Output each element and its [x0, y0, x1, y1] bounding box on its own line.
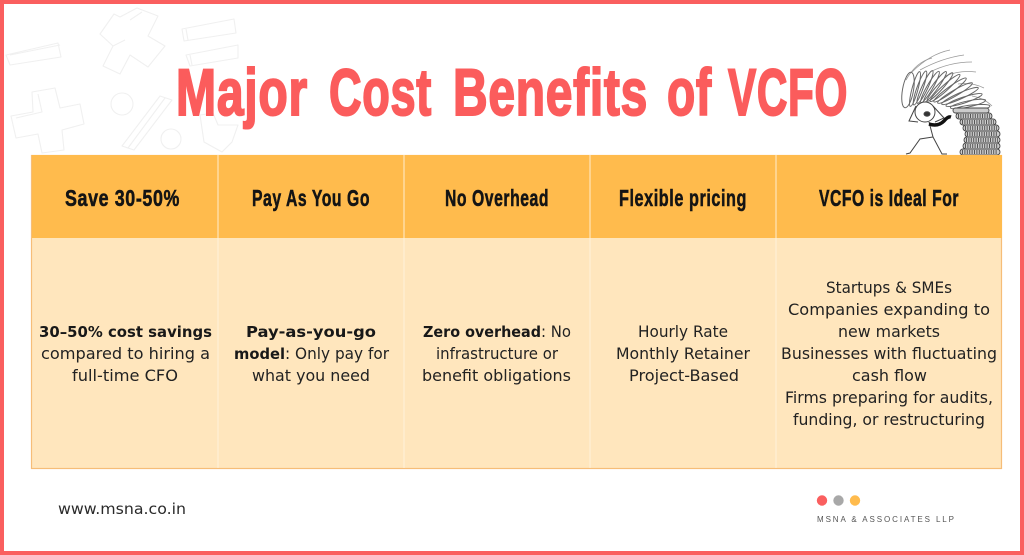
column 2 text: pay as you go: model	[234, 345, 285, 363]
falling coins	[899, 69, 990, 113]
column 3 text: zero overhead: Zero overhead	[423, 323, 541, 341]
stick figure	[906, 102, 951, 154]
column 5 text: ideal for: Firms preparing for audits,	[785, 389, 993, 407]
column 4 text: pricing models: Monthly Retainer	[616, 345, 751, 363]
title: Cost	[329, 55, 432, 129]
column 3 text: zero overhead: benefit obligations	[422, 367, 571, 385]
column 5 text: ideal for	[781, 279, 997, 429]
column 5 text: ideal for: Businesses with fluctuating	[781, 345, 997, 363]
column 1 text: cost savings: compared to hiring a	[41, 345, 210, 363]
column 1 text: cost savings: full-time CFO	[72, 367, 178, 385]
column 4 text: pricing models: Project-Based	[629, 367, 739, 385]
comparison table	[32, 155, 1002, 468]
column 4 text: pricing models: Hourly Rate	[638, 323, 728, 341]
illustration: stick figure under falling coins	[899, 50, 1000, 155]
table header band	[32, 155, 1002, 238]
table body background	[32, 156, 1002, 468]
title: VCFO	[728, 55, 848, 129]
footer logo: MSNA & ASSOCIATES LLP	[817, 515, 954, 524]
column 2 text: pay as you go: : Only pay for	[285, 345, 390, 363]
column 1 text: cost savings: 30–50% cost savings	[39, 323, 212, 341]
title	[176, 55, 848, 129]
column headings	[65, 185, 959, 211]
column 3 text: zero overhead: infrastructure or	[436, 345, 559, 363]
column 5 text: ideal for: funding, or restructuring	[793, 411, 985, 429]
column headings: No Overhead	[445, 185, 549, 211]
column 5 text: ideal for: new markets	[838, 323, 940, 341]
column 4 text: pricing models	[616, 323, 751, 385]
column headings: Save 30-50%	[65, 185, 180, 211]
column 5 text: ideal for: Startups & SMEs	[826, 279, 952, 297]
coin stack	[953, 108, 1000, 155]
column 2 text: pay as you go: what you need	[252, 367, 370, 385]
column 5 text: ideal for: cash flow	[852, 367, 927, 385]
column 3 text: zero overhead: : No	[541, 323, 571, 341]
column 2 text: pay as you go	[234, 323, 390, 385]
column 5 text: ideal for: Companies expanding to	[788, 301, 990, 319]
column 2 text: pay as you go: Pay-as-you-go	[246, 323, 376, 341]
column headings: Flexible pricing	[619, 185, 747, 211]
footer website: www.msna.co.in	[58, 500, 186, 518]
column headings: Pay As You Go	[252, 185, 370, 211]
motion lines	[906, 50, 992, 106]
column headings: VCFO is Ideal For	[819, 185, 959, 211]
title: Major	[176, 55, 308, 129]
title: Benefits	[453, 55, 648, 129]
footer logo	[817, 495, 954, 524]
decorative math symbols background	[6, 8, 238, 153]
column 3 text: zero overhead	[422, 323, 571, 385]
column 1 text: cost savings	[39, 323, 212, 385]
title: of	[667, 55, 712, 129]
